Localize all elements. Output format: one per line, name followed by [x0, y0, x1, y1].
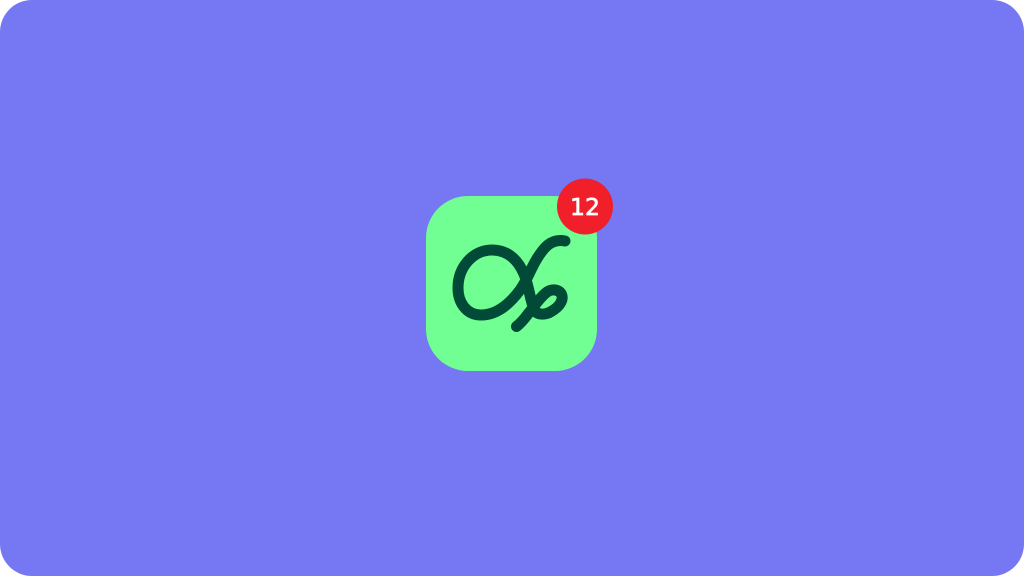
badge circle [557, 178, 613, 234]
app tile [426, 196, 597, 371]
logo: looped script glyph [458, 240, 565, 326]
icon: green app tile with logo [426, 196, 597, 371]
notification badge [557, 178, 613, 234]
badge count: 12 [570, 193, 600, 221]
